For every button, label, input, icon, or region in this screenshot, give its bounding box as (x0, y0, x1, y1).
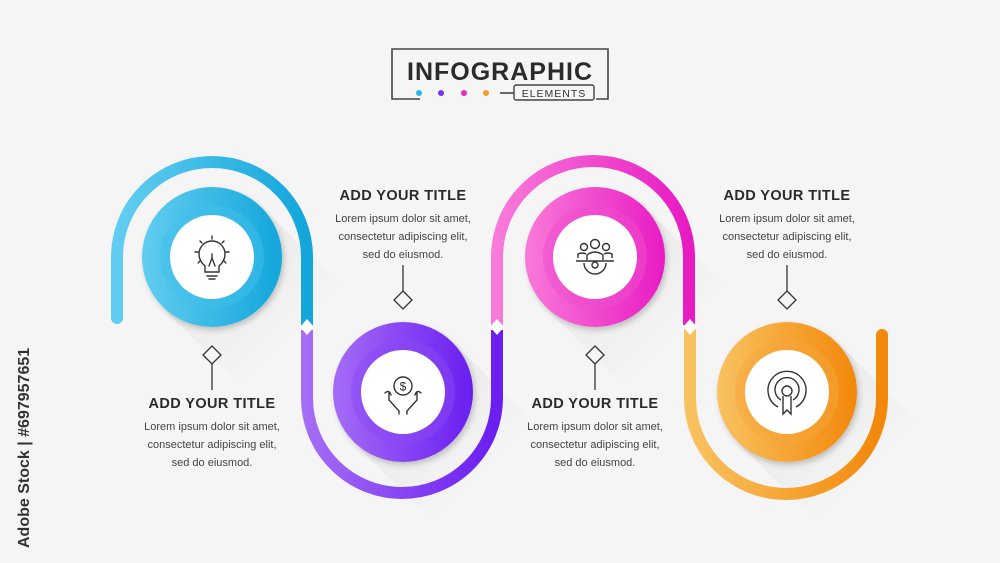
text block 3: consectetur adipiscing elit, (530, 439, 660, 451)
title box: INFOGRAPHIC (407, 58, 593, 86)
icon: team gear (576, 240, 614, 274)
icon: target award (768, 371, 806, 414)
track: purple (307, 330, 497, 493)
vertical watermark text: Adobe Stock | #697957651 (16, 348, 33, 548)
text block 4: Lorem ipsum dolor sit amet, (719, 213, 855, 225)
text block 2: ADD YOUR TITLE (340, 188, 466, 204)
icon: hands with coin: $ (400, 380, 407, 394)
text block 1: sed do eiusmod. (172, 457, 252, 469)
track: pink (497, 161, 689, 325)
text block 1: Lorem ipsum dolor sit amet, (144, 421, 280, 433)
junction diamonds (300, 319, 697, 335)
text block 3: Lorem ipsum dolor sit amet, (527, 421, 663, 433)
text block 4 (719, 188, 855, 261)
icon: lightbulb (195, 236, 229, 279)
circle 3 (525, 187, 665, 327)
text block 3: ADD YOUR TITLE (532, 396, 658, 412)
icon: hands with coin (385, 377, 421, 414)
text block 2: sed do eiusmod. (363, 249, 443, 261)
text block 4: ADD YOUR TITLE (724, 188, 850, 204)
text block 2: consectetur adipiscing elit, (338, 231, 468, 243)
text block 2: Lorem ipsum dolor sit amet, (335, 213, 471, 225)
circle 1 (142, 187, 282, 327)
title box: ELEMENTS (522, 88, 586, 100)
track: orange (690, 330, 882, 494)
text block 3 (527, 396, 663, 469)
text block 3: sed do eiusmod. (555, 457, 635, 469)
track: blue (117, 162, 307, 325)
connectors (203, 265, 796, 390)
text block 1 (144, 396, 280, 469)
circle 4 (717, 322, 857, 462)
text block 1: consectetur adipiscing elit, (147, 439, 276, 451)
shadows (162, 207, 927, 532)
title box (392, 49, 608, 100)
text block 2 (335, 188, 471, 261)
text block 1: ADD YOUR TITLE (148, 396, 275, 412)
circle 2 (333, 322, 473, 462)
text block 4: sed do eiusmod. (747, 249, 827, 261)
text block 4: consectetur adipiscing elit, (722, 231, 852, 243)
